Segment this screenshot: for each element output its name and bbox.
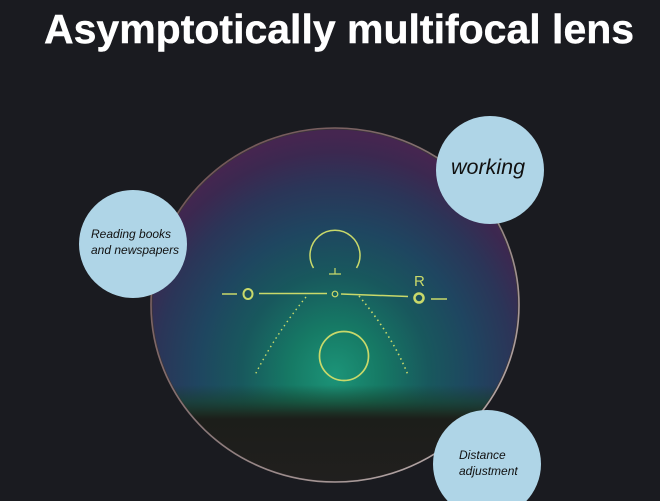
label: reading [91,227,179,256]
lens body [140,128,530,485]
lower large circle [320,332,368,380]
label: distance [459,448,518,478]
semicircle reference [310,230,360,268]
label: reading: Reading books [91,227,171,241]
bubble: distance [433,410,541,501]
label: reading: and newspapers [91,242,179,256]
label: distance: Distance [459,448,506,462]
center circle [332,291,338,297]
label: working: working [451,155,525,179]
horizontal line left [222,292,327,295]
left circle [244,289,252,299]
horizontal line right [341,294,447,299]
right circle [414,294,424,302]
bubble: working [436,116,544,224]
title: Asymptotically multifocal lens [44,6,634,52]
lens engraved markings [222,230,447,380]
left dotted arc [255,297,306,375]
letter R: R [414,273,425,290]
label: distance: adjustment [459,464,518,478]
bubble: reading [79,190,187,298]
cross mark [329,268,341,274]
lens illustration [150,127,520,483]
right dotted arc [359,296,408,375]
